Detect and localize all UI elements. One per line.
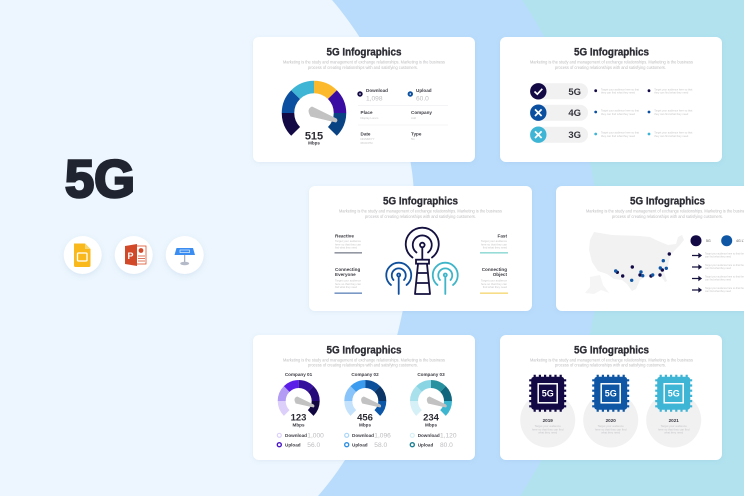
subtitle: Marketing is the study and management of exchange relationships. Marketing is the business: [530, 60, 693, 64]
column: 2021: [646, 375, 701, 448]
subtitle: [283, 60, 445, 70]
gauge: company 01: Download: [285, 433, 307, 438]
gauge: company 01: 1,000: [307, 432, 324, 440]
map legend: 5G: [706, 239, 711, 243]
column: 2019: [520, 375, 575, 448]
text: Reactive: here so that they can: [335, 242, 361, 246]
icon: Keynote: [166, 236, 204, 274]
map markers: 5G: [616, 252, 671, 278]
stats: type: 5G: [411, 137, 415, 141]
panel: network comparison: [500, 37, 722, 162]
text: Connecting Object: here so that they can: [481, 282, 507, 286]
gauge chart: [288, 87, 340, 131]
column: 2021: here so that they can find: [658, 427, 690, 431]
row: 3G: [530, 126, 693, 143]
US map: [585, 232, 684, 294]
subtitle: process of creating relationships with and satisfying customers.: [308, 362, 418, 368]
main title: 5G: 5G: [65, 150, 135, 209]
row: 3G: they can find what they need: [601, 134, 635, 138]
row: 5G: Target your audience here so that: [654, 87, 693, 91]
text: Fast: Fast: [498, 234, 507, 238]
row: 5G: [530, 83, 693, 100]
gauge: company 03: Company 03: [417, 372, 445, 377]
heading: 5G Infographics: [574, 46, 649, 58]
app icons row: [64, 236, 204, 274]
heading: 5G Infographics: [630, 196, 705, 208]
icon: PowerPoint: P: [128, 251, 134, 261]
column: 2020: 2020: [606, 418, 616, 423]
row: 4G: Target your audience here so that: [654, 109, 693, 113]
row: 3G: 3G: [568, 130, 581, 141]
stats: upload: 60.0: [416, 96, 429, 102]
gauge: company 03: Mbps: [425, 423, 437, 428]
subtitle: process of creating relationships with and satisfying customers.: [555, 362, 666, 368]
row: 5G: they can find what they need: [601, 90, 635, 94]
text: Reactive: [334, 234, 362, 254]
column: 2021: 5G: [668, 388, 680, 398]
text: Fast: Target your audience: [481, 239, 507, 243]
column: 2021: what they need: [664, 431, 684, 435]
icon: Google Slides: [64, 236, 102, 274]
column: 2019: 2019: [543, 418, 553, 423]
column: 2020: Target your audience: [598, 424, 624, 428]
stats: place: Display Lorem: [360, 116, 379, 120]
row: 5G: 5G: [568, 87, 581, 98]
column: 2019: Target your audience: [535, 424, 561, 428]
text: Connecting Everyone: here so that they can: [335, 282, 361, 286]
text: Connecting Everyone: find what they need: [335, 285, 357, 289]
gauge: company 03: [410, 372, 457, 449]
stats: type: [411, 132, 422, 141]
stats: upload: Upload: [416, 88, 432, 93]
gauge: company 03: Download: [418, 433, 440, 438]
subtitle: Marketing is the study and management of exchange relationships. Marketing is the business: [283, 60, 445, 64]
stats: company: [411, 110, 432, 120]
text: Connecting Everyone: Target your audience: [335, 278, 361, 282]
stats: place: Place: [360, 110, 373, 115]
gauge: company 02: 1,096: [374, 432, 391, 440]
subtitle: process of creating relationships with and satisfying customers.: [555, 65, 666, 70]
text: Connecting Object: Object: [493, 272, 507, 277]
gauge: company 03: 234: [423, 412, 440, 424]
text: Reactive: find what they need: [335, 246, 357, 250]
gauge: company 02: 456: [357, 412, 373, 424]
arrow list: can find what they need: [705, 289, 731, 293]
panel: speed gauge: [253, 37, 475, 162]
arrow list: can find what they need: [705, 254, 731, 258]
gauge: company 02: Company 02: [351, 372, 379, 377]
subtitle: [530, 60, 693, 70]
arrow list: [692, 251, 744, 293]
row: 3G: Target your audience here so that: [654, 131, 693, 135]
row: 3G: Target your audience here so that: [601, 131, 639, 135]
text: Connecting Object: find what they need: [483, 285, 507, 289]
gauge: company 01: [277, 372, 324, 449]
row: 4G: they can find what they need: [601, 112, 635, 116]
text: Connecting Object: Connecting: [482, 267, 507, 272]
heading: 5G Infographics: [574, 344, 649, 356]
text: Connecting Everyone: Everyone: [335, 272, 356, 277]
stats: date: DD/MM/YY: [360, 137, 375, 141]
subtitle: process of creating relationships with and satisfying customers.: [365, 214, 476, 219]
gauge: company 02: Download: [352, 433, 374, 438]
gauge: company 01: 56.0: [307, 442, 320, 449]
row: 4G: 4G: [568, 108, 581, 119]
background: teal wave: [520, 0, 744, 496]
stats: date: Date: [360, 132, 371, 136]
stats: download: [357, 88, 388, 102]
row: 5G: they can find what they need: [654, 90, 689, 94]
stats: place: [360, 110, 379, 120]
stats: date: 08:00 PM: [360, 141, 373, 145]
stats: upload: [408, 88, 432, 102]
gauge: company 03: 80.0: [440, 442, 453, 449]
column: 2019: what they need: [538, 431, 558, 435]
column: 2020: [583, 375, 638, 448]
subtitle: Marketing is the study and management of exchange relationships. Marketing is the business: [530, 358, 693, 362]
subtitle: [586, 208, 744, 219]
gauge: company 03: Upload: [418, 442, 433, 447]
gauge: company 02: Mbps: [359, 423, 371, 428]
stats: download: Download: [366, 88, 388, 93]
column: 2020: here so that they can find: [595, 427, 627, 431]
gauge unit: Mbps: [308, 140, 320, 146]
text: Connecting Object: Target your audience: [481, 278, 507, 282]
gauge: company 01: 123: [291, 412, 306, 424]
column: 2021: Target your audience: [661, 424, 687, 428]
heading: 5G Infographics: [383, 196, 458, 208]
gauge: company 03: 1,120: [440, 432, 457, 440]
text: Connecting Everyone: Connecting: [335, 267, 360, 272]
map markers: 4G: [614, 259, 668, 282]
subtitle: [530, 358, 693, 368]
stats: date: [360, 132, 375, 145]
gauge value: 515: [305, 130, 323, 142]
text: Fast: [480, 234, 508, 254]
arrow list: can find what they need: [705, 266, 731, 270]
map legend: [690, 235, 744, 246]
subtitle: Marketing is the study and management of exchange relationships. Marketing is the business: [283, 358, 445, 362]
column: 2019: here so that they can find: [532, 427, 564, 431]
stats: type: Type: [411, 132, 422, 136]
column: 2020: 5G: [605, 388, 617, 398]
background: light left wave: [0, 0, 414, 496]
text: Reactive: Target your audience: [335, 239, 361, 243]
row: 4G: Target your audience here so that: [601, 109, 639, 113]
column: 2020: what they need: [601, 431, 621, 435]
stats: company: Company: [411, 110, 432, 115]
text: Connecting Object: [480, 267, 508, 294]
row: 4G: they can find what they need: [654, 112, 689, 116]
subtitle: [339, 208, 502, 219]
panel: coverage map: [556, 186, 744, 311]
panel: antenna: [309, 186, 532, 311]
gauge needle: [309, 106, 337, 122]
row: 3G: they can find what they need: [654, 134, 689, 138]
panel: company gauges: [253, 335, 475, 460]
text: Fast: find what they need: [483, 246, 507, 250]
row: 5G: Target your audience here so that: [601, 87, 639, 91]
gauge: company 02: [345, 372, 391, 449]
subtitle: process of creating relationships with and satisfying customers.: [308, 65, 418, 70]
gauge: company 01: Company 01: [285, 372, 313, 377]
gauge: company 01: Upload: [285, 442, 301, 447]
heading: 5G Infographics: [326, 46, 402, 58]
text: Connecting Everyone: [334, 267, 362, 294]
arrow list: can find what they need: [705, 277, 731, 281]
stats: download: 1,098: [366, 96, 383, 102]
column: 2021: 2021: [669, 418, 679, 423]
heading: 5G Infographics: [326, 344, 402, 356]
gauge: company 02: 58.0: [374, 442, 387, 449]
row: 4G: [530, 104, 693, 121]
text: Reactive: Reactive: [335, 234, 354, 238]
column: 2019: 5G: [542, 388, 554, 398]
gauge: company 02: Upload: [352, 442, 368, 447]
stats: company: Add: [411, 116, 416, 120]
panel: chip timeline: [500, 335, 722, 460]
subtitle: process of creating relationships with and satisfying customers.: [612, 214, 723, 219]
subtitle: Marketing is the study and management of exchange relationships. Marketing is the business: [339, 208, 502, 214]
text: Fast: here so that they can: [481, 242, 507, 246]
icon: antenna tower: [386, 228, 458, 294]
gauge: company 01: Mbps: [292, 423, 305, 428]
subtitle: [283, 358, 445, 368]
